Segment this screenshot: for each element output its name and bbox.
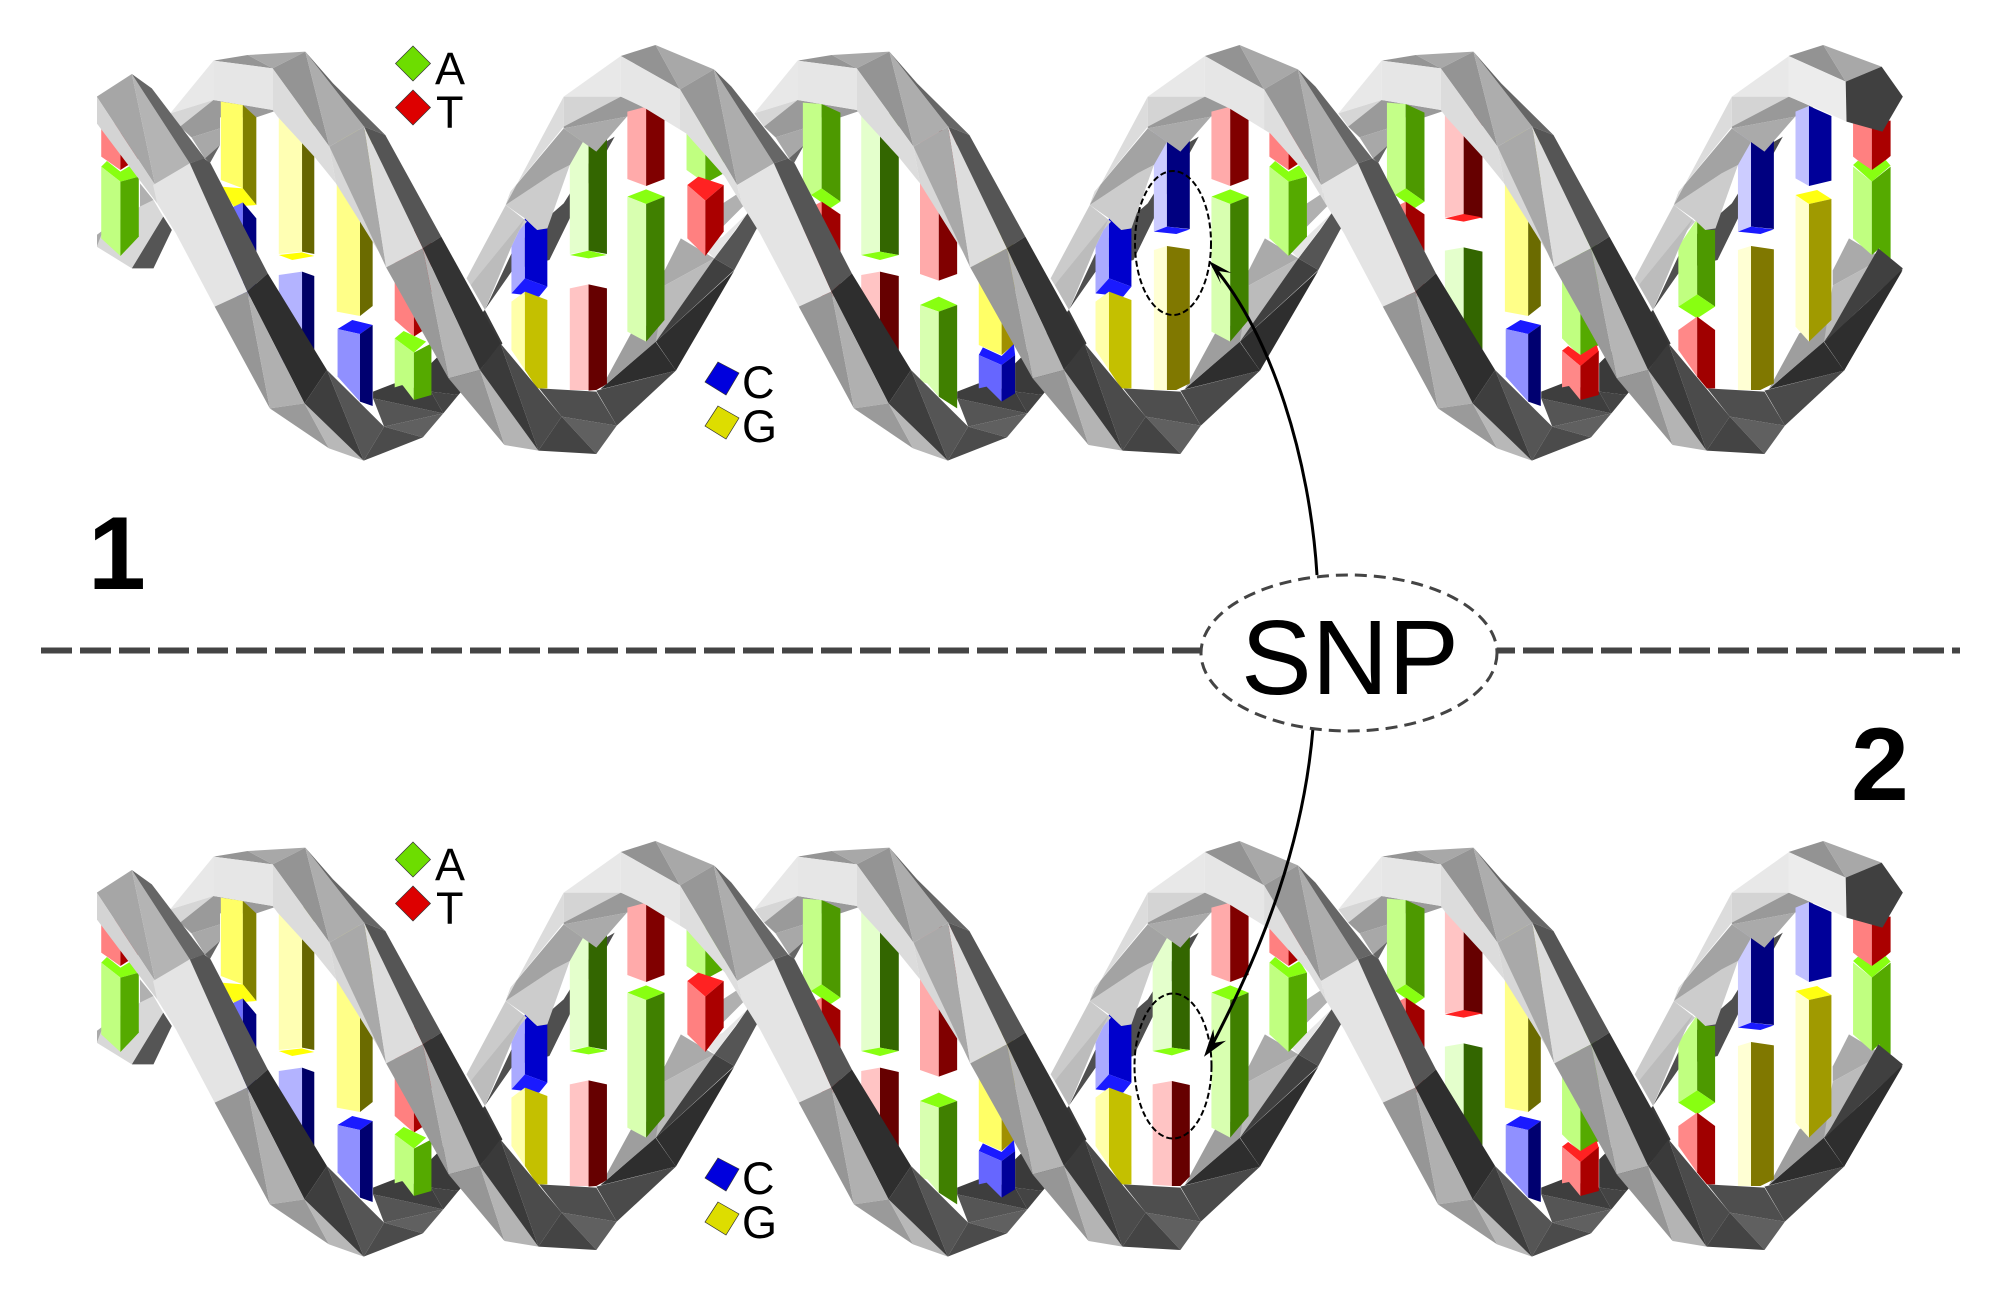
legend 1: C and G: [705, 357, 777, 452]
legend 2: C and G: [705, 1153, 777, 1248]
SNP callout: SNP: [1241, 599, 1459, 717]
legend 2: A and T: T: [436, 883, 464, 934]
SNP callout: [1201, 575, 1497, 731]
upper SNP ellipse: [1135, 171, 1211, 315]
DNA helix 2: [97, 841, 1903, 1257]
dashed divider: [41, 648, 1960, 654]
arrow to upper SNP: [1209, 261, 1317, 575]
legend 1: C and G: G: [742, 401, 777, 452]
label 2: 2: [1851, 707, 1909, 823]
arrow to lower SNP: [1204, 728, 1313, 1057]
legend 1: A and T: A: [435, 43, 465, 94]
legend 1: A and T: [396, 43, 465, 138]
legend 1: A and T: T: [436, 87, 464, 138]
legend 2: C and G: C: [742, 1153, 774, 1204]
legend 1: C and G: C: [742, 357, 774, 408]
legend 2: A and T: A: [435, 839, 465, 890]
lower SNP ellipse: [1134, 994, 1212, 1138]
DNA helix 1: [97, 45, 1903, 461]
legend 2: C and G: G: [742, 1197, 777, 1248]
legend 2: A and T: [396, 839, 465, 934]
label 1: 1: [88, 496, 146, 612]
